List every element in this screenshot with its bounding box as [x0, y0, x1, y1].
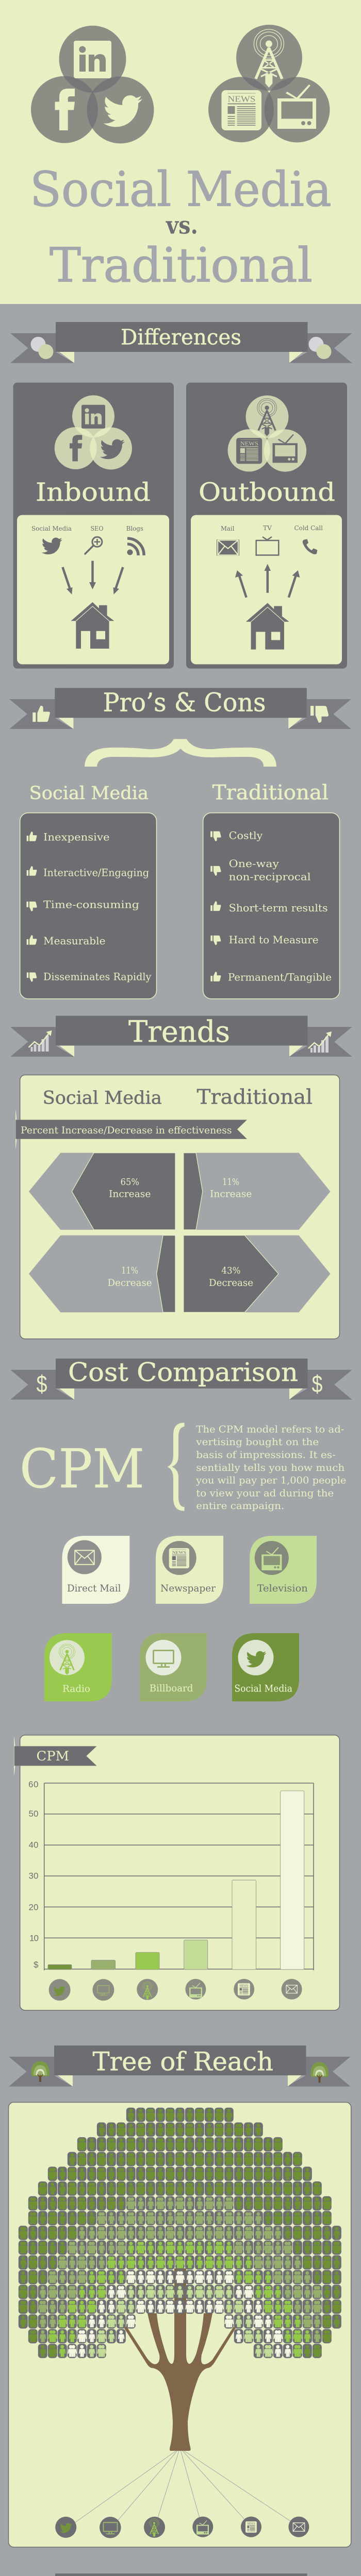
panel: traditional pros and cons	[203, 813, 339, 999]
title: Traditional	[50, 238, 313, 293]
column heading: traditional: Traditional	[212, 782, 329, 805]
inbound diagram: Blogs	[126, 525, 143, 532]
heading: Trends: Trends	[128, 1015, 230, 1049]
panel: trends	[15, 1075, 339, 1339]
ribbon: CPM	[14, 1736, 97, 1776]
chart: traditional decrease 43%: Decrease	[209, 1277, 253, 1289]
chart: traditional increase 11%: 11%	[222, 1177, 239, 1188]
panel: traditional pros and cons: One-way	[229, 857, 280, 870]
trend column headings: Traditional	[197, 1086, 313, 1109]
heading: Social Influence	[10, 2573, 352, 2576]
CPM definition: The CPM model refers to ad-	[196, 1424, 344, 1435]
panel: traditional pros and cons: Permanent/Tangible	[228, 971, 332, 983]
icon cluster: traditional media	[208, 25, 330, 142]
y axis labels: 60	[28, 1780, 38, 1789]
title: vs.	[166, 211, 198, 240]
chart category icons	[49, 1979, 302, 2001]
outbound diagram	[191, 515, 342, 664]
panel: social media pros and cons: Disseminates Rapidly	[43, 970, 152, 982]
panel: traditional pros and cons: non-reciprocal	[229, 871, 311, 883]
chart: social media decrease 11%	[29, 1235, 175, 1312]
tile: newspaper	[156, 1536, 223, 1604]
title	[30, 161, 332, 293]
tile: television	[250, 1536, 317, 1604]
curly brace	[85, 739, 276, 767]
heading: Tree of Reach: Tree of Reach	[93, 2046, 273, 2076]
chart: social media decrease 11%: Decrease	[107, 1277, 152, 1289]
heading: Cost Comparison: $	[311, 1370, 323, 1397]
icon cluster: outbound	[228, 396, 306, 472]
CPM definition: sentially tells you how much	[196, 1462, 344, 1473]
tile: billboard: Billboard	[150, 1683, 193, 1694]
tile: billboard	[140, 1633, 207, 1701]
panel: traditional pros and cons: Short-term results	[229, 902, 328, 914]
title: Social Media	[30, 161, 332, 217]
panel: social media pros and cons: Interactive/Engaging	[43, 867, 149, 879]
CPM definition: to view your ad during the	[196, 1487, 334, 1499]
inbound heading: Inbound	[36, 478, 151, 507]
chart: traditional decrease 43%	[184, 1235, 331, 1312]
chart: social media increase 65%: 65%	[121, 1177, 139, 1188]
tree trunk and branches	[124, 2268, 236, 2451]
chart: traditional increase 11%	[184, 1153, 331, 1230]
icon cluster: social networks	[31, 26, 154, 143]
panel: social media pros and cons: Time-consuming	[43, 899, 139, 911]
CPM definition: basis of impressions. It es-	[196, 1449, 336, 1461]
panel: social media pros and cons: Inexpensive	[43, 831, 109, 843]
tile: social media: Social Media	[234, 1683, 292, 1694]
ribbon: percent increase	[15, 1109, 247, 1150]
tile: television: Television	[257, 1583, 308, 1594]
channel icons	[55, 2517, 309, 2538]
heading: Differences: Differences	[121, 325, 241, 350]
inbound diagram: Social Media	[31, 525, 72, 532]
tile: newspaper: Newspaper	[160, 1583, 216, 1594]
chart: traditional decrease 43%: 43%	[221, 1265, 240, 1276]
panel: tree of reach	[8, 2102, 351, 2547]
chart: social media increase 65%	[29, 1153, 175, 1230]
CPM definition: entire campaign.	[196, 1500, 284, 1512]
CPM heading: CPM	[20, 1437, 144, 1500]
heading: Cost Comparison: $	[36, 1370, 47, 1397]
panel: traditional pros and cons: Costly	[229, 829, 263, 841]
CPM definition	[195, 1424, 346, 1512]
panel: social media pros and cons: Measurable	[43, 935, 105, 947]
panel: outbound	[186, 383, 347, 669]
y axis labels: 40	[29, 1840, 38, 1850]
inbound diagram: SEO	[91, 525, 104, 532]
y axis labels	[28, 1780, 39, 1970]
heading: Trends	[10, 1015, 352, 1057]
tile: direct mail	[62, 1536, 129, 1604]
trend column headings	[43, 1086, 313, 1109]
brace	[167, 1422, 185, 1511]
y axis labels: 10	[29, 1933, 39, 1943]
panel: inbound	[13, 383, 174, 669]
canopy of people	[18, 2107, 341, 2359]
trend column headings: Social Media	[43, 1088, 162, 1109]
icon cluster: inbound	[55, 395, 132, 469]
heading: Tree of Reach	[9, 2045, 351, 2087]
inbound diagram	[17, 515, 169, 664]
outbound diagram: Mail	[221, 525, 235, 532]
roots	[75, 2451, 290, 2522]
tile: direct mail: Direct Mail	[67, 1583, 121, 1594]
heading: Differences	[10, 322, 352, 363]
chart axes and gridlines	[44, 1783, 314, 1970]
panel: social media pros and cons	[20, 813, 156, 999]
tile: social media	[232, 1633, 299, 1701]
heading: Pro's & Cons: Pro’s & Cons	[103, 687, 266, 717]
bars	[48, 1791, 304, 1970]
chart: traditional increase 11%: Increase	[210, 1188, 252, 1199]
chart: social media increase 65%: Increase	[109, 1188, 151, 1199]
y axis labels: 30	[29, 1871, 38, 1880]
column heading: social media: Social Media	[29, 783, 149, 804]
y axis labels: $	[34, 1960, 39, 1970]
tile: radio: Radio	[62, 1683, 90, 1694]
y axis labels: 50	[29, 1809, 38, 1819]
ribbon: CPM: CPM	[36, 1749, 69, 1764]
outbound diagram: TV	[263, 524, 272, 532]
heading: Cost Comparison	[10, 1357, 352, 1400]
y axis labels: 20	[29, 1903, 38, 1912]
heading: Pro's & Cons	[9, 687, 351, 729]
tile: radio	[44, 1633, 112, 1701]
heading: Cost Comparison: Cost Comparison	[68, 1357, 298, 1387]
chart: social media decrease 11%: 11%	[121, 1265, 138, 1276]
panel: traditional pros and cons: Hard to Measure	[229, 934, 319, 946]
panel: CPM chart	[14, 1735, 339, 2010]
outbound diagram: Cold Call	[294, 524, 323, 532]
outbound heading: Outbound	[199, 478, 335, 507]
CPM definition: you will pay per 1,000 people	[195, 1475, 346, 1486]
ribbon: percent increase: Percent Increase/Decrease in effectiveness	[21, 1125, 232, 1136]
CPM definition: vertising bought on the	[195, 1436, 319, 1448]
page background top	[0, 0, 361, 304]
